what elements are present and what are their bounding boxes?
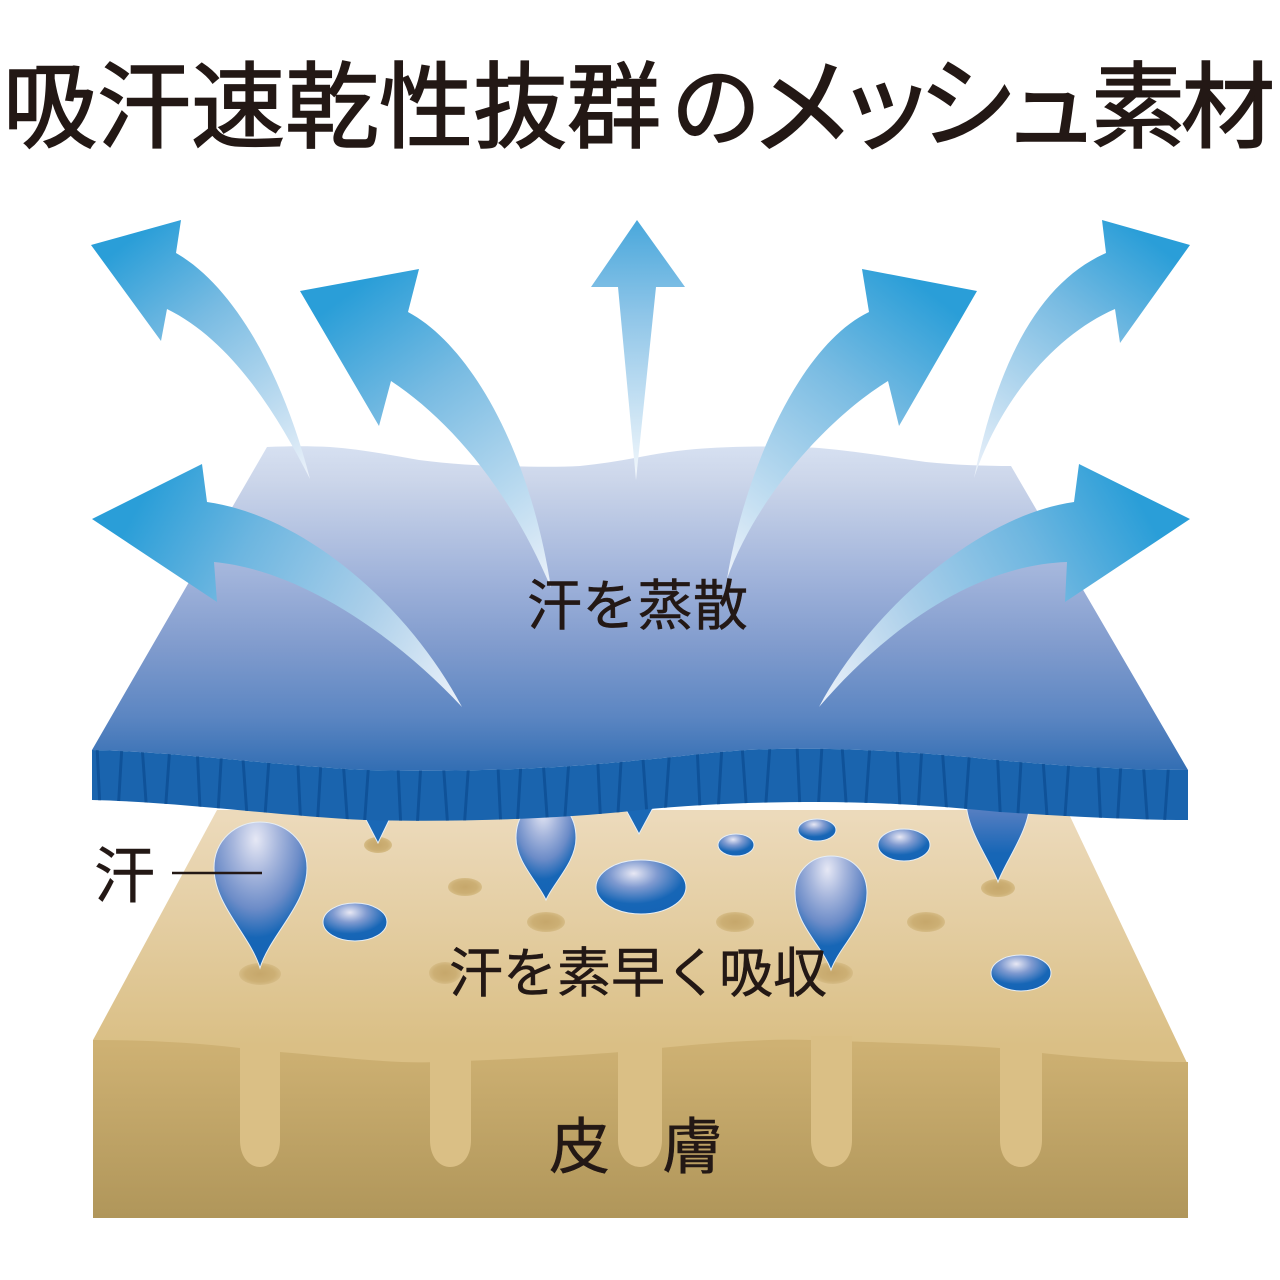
drop: small behind fabric [362,812,393,843]
title: メ [750,50,856,168]
drop: center left [516,800,576,900]
arrow: inner right [727,269,977,579]
bead [991,955,1051,991]
arrow: far right [974,220,1190,478]
title: 素材 [1091,55,1275,160]
title: の [671,59,761,159]
arrow: center [591,220,685,480]
bead [323,903,387,941]
sweat leader line [172,872,262,874]
title: シ [918,49,1018,161]
label: skin: 皮膚 [549,1113,723,1181]
sweat gland ducts [240,1036,1042,1167]
fabric top surface [92,446,1188,771]
sweat drops [214,800,1051,991]
bead [878,829,930,861]
title: 吸汗速乾性抜群 [3,55,661,160]
skin front face [93,1040,1188,1218]
bead [798,819,836,841]
arrow: inner left [300,269,551,588]
fabric front edge [92,749,1188,821]
bead [596,860,686,914]
title: ッ [836,51,936,163]
title: ュ [1003,56,1099,163]
mesh fabric [92,446,1188,821]
arrow: lower right [819,464,1190,707]
label: sweat: 汗 [94,842,155,910]
skin block [93,810,1188,1218]
label: absorb: 汗を素早く吸収 [449,944,827,1004]
arrow: lower left [92,464,462,707]
skin surface [93,810,1188,1070]
label: evaporate: 汗を蒸散 [527,575,748,637]
arrow: far left [91,220,310,479]
drop: center small tip [625,808,653,834]
sweat pores [239,837,1015,985]
drop: right of center [795,856,867,970]
bead [718,834,754,856]
drop: right behind fabric [966,800,1030,882]
drop: large left [214,822,307,968]
mesh weave lines [92,749,1188,821]
